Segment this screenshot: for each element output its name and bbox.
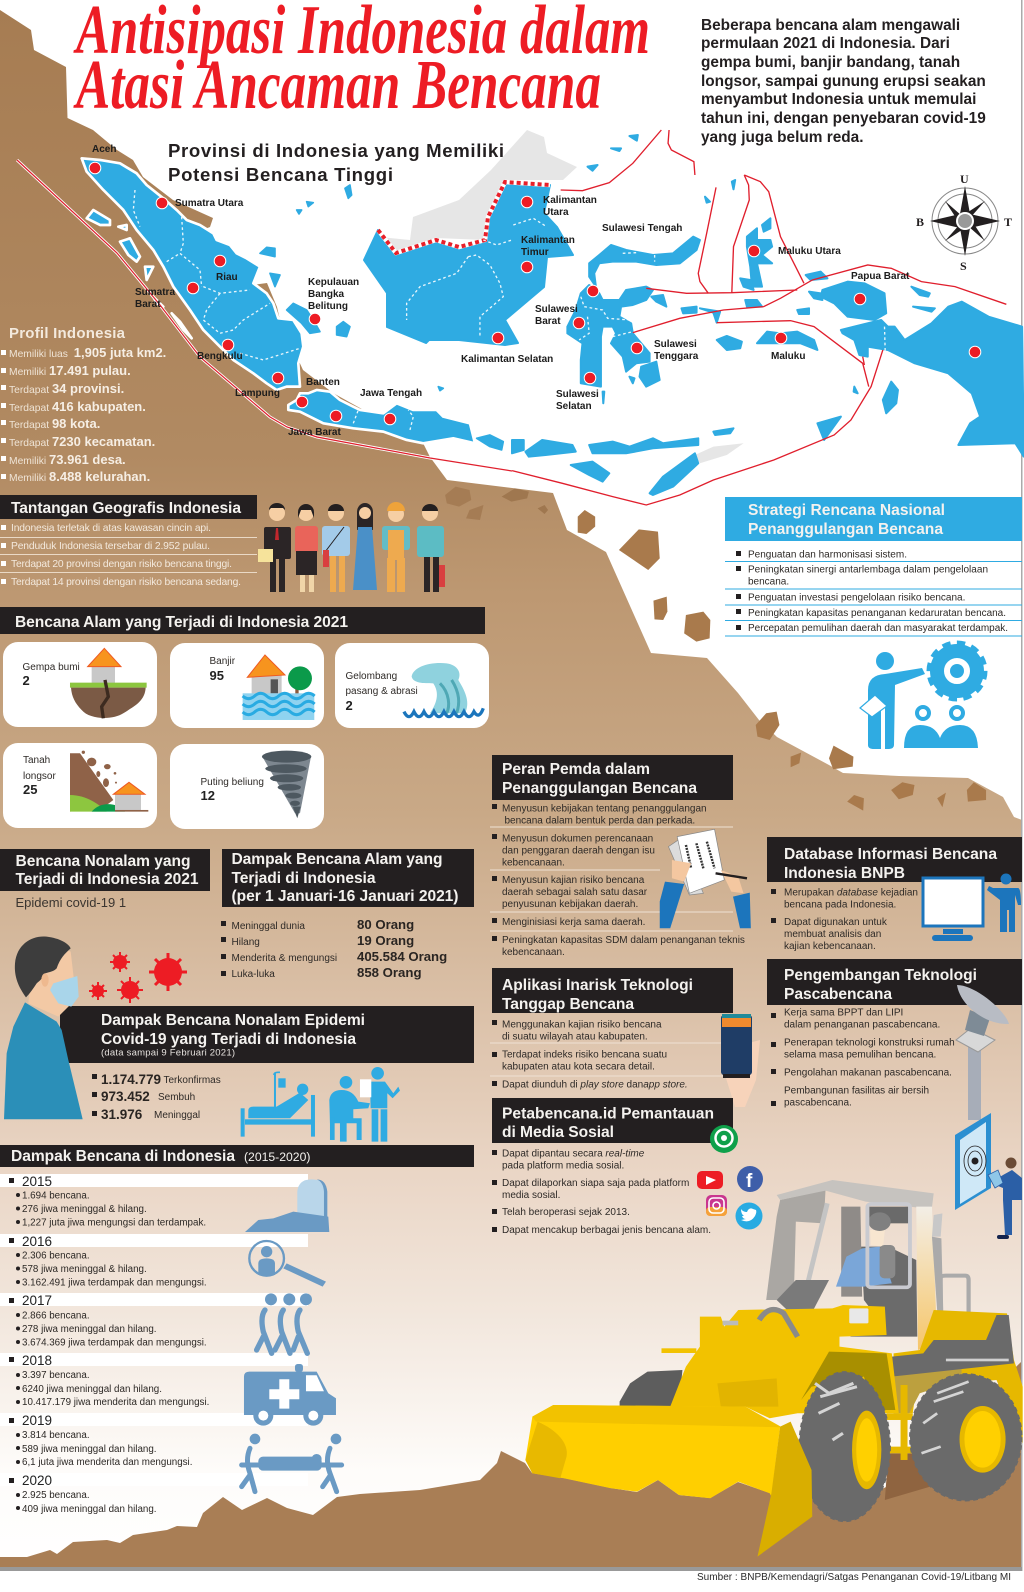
card: banjir: 95 [210, 668, 224, 683]
panel: dampak bencana 2015-2020 [0, 1145, 474, 1515]
year: 2017: 2017 [22, 1293, 52, 1308]
province labels [92, 144, 910, 438]
card: gelombang pasang: pasang & abrasi [346, 686, 418, 697]
panel: petabencana [492, 1098, 733, 1236]
map heading: Potensi Bencana Tinggi [168, 164, 393, 185]
panel: petabencana: media sosial. [502, 1190, 560, 1201]
panel: strategi rencana nasional: Peningkatan sinergi antarlembaga dalam pengelolaan [748, 564, 988, 576]
card: tanah longsor: 25 [23, 782, 37, 797]
panel: dampak bencana alam januari: Terjadi di Indonesia [232, 870, 376, 887]
panel: pengembangan teknologi: selama masa pemulihan bencana. [784, 1050, 936, 1060]
card: banjir [170, 643, 324, 728]
loader: front wheel [799, 1372, 890, 1521]
panel: peran pemda: Peningkatan kapasitas SDM dalam penanganan teknis [502, 935, 745, 946]
year: 2015: 276 jiwa meninggal & hilang. [22, 1204, 147, 1215]
icon: search for victims [249, 1241, 326, 1287]
year: 2020: 409 jiwa meninggal dan hilang. [22, 1504, 157, 1515]
panel: dampak bencana alam januari: Dampak Bencana Alam yang [232, 851, 442, 868]
title [73, 0, 650, 124]
panel: peran pemda: kebencanaan. [502, 947, 565, 958]
panel: bencana nonalam: Epidemi covid-19 1 [16, 895, 126, 910]
panel: database informasi: Merupakan database kejadian [784, 888, 918, 898]
province labels: Sulawesi [535, 304, 578, 315]
year: 2018: 6240 jiwa meninggal dan hilang. [22, 1384, 162, 1395]
panel: database informasi: bencana pada Indonesia. [784, 900, 896, 910]
card: gempa bumi [3, 642, 157, 727]
icon: gravestone [245, 1179, 329, 1232]
panel: bencana nonalam: Terjadi di Indonesia 2021 [16, 871, 199, 888]
intro paragraph: Beberapa bencana alam mengawali [701, 17, 960, 34]
icon: antenna and tablet [955, 985, 1022, 1239]
panel: dampak bencana alam januari: Meninggal dunia [232, 921, 305, 932]
panel: aplikasi inarisk: di suatu wilayah atau kabupaten. [502, 1032, 648, 1042]
panel: aplikasi inarisk: Aplikasi Inarisk Teknologi [502, 977, 693, 994]
icon: hands and document [660, 829, 751, 928]
loader: far wheel [620, 1370, 682, 1407]
intro paragraph: yang juga belum reda. [701, 129, 864, 146]
intro paragraph: longsor, sampai gunung erupsi seakan [701, 73, 986, 90]
panel: dampak covid-19: 973.452 [101, 1089, 150, 1104]
Malaysia and Timor Leste (grey) [380, 130, 744, 463]
panel: dampak bencana alam januari: Hilang [232, 937, 260, 948]
icon: man with mask [4, 936, 83, 1119]
panel: pengembangan teknologi: dalam penanganan pascabencana. [784, 1020, 940, 1030]
panel: dampak bencana alam januari: Luka-luka [232, 969, 275, 980]
icon: six citizens [258, 502, 445, 592]
compass: T [1004, 215, 1012, 229]
panel: petabencana: Petabencana.id Pemantauan [502, 1106, 714, 1122]
card: gempa bumi: 2 [22, 673, 30, 688]
panel: tantangan geografis: Penduduk Indonesia tersebar di 2.952 pulau. [11, 541, 210, 552]
card: puting beliung [170, 744, 324, 829]
card: gelombang pasang [335, 643, 489, 728]
year: 2015: 1.694 bencana. [22, 1190, 90, 1202]
card: banjir: Banjir [210, 656, 236, 667]
panel: pengembangan teknologi: Pengolahan makanan pascabencana. [784, 1068, 952, 1078]
panel: dampak covid-19: Terkonfirmas [164, 1075, 221, 1086]
panel: tantangan geografis: Terdapat 20 provinsi dengan risiko bencana tinggi. [11, 559, 232, 570]
panel: dampak covid-19: Meninggal [154, 1110, 200, 1121]
panel: aplikasi inarisk [490, 968, 733, 1090]
year: 2016: 2.306 bencana. [22, 1250, 90, 1262]
panel: dampak bencana alam januari: (per 1 Januari-16 Januari 2021) [232, 888, 458, 905]
year: 2015: 1,227 juta jiwa mengungsi dan terdampak. [22, 1218, 206, 1228]
panel: profil Indonesia: Terdapat 7230 kecamatan. [9, 434, 155, 449]
panel: bencana nonalam [0, 849, 210, 910]
province labels: Kalimantan Selatan [461, 354, 553, 365]
icon: virus particles [89, 952, 187, 1003]
panel: aplikasi inarisk: Dapat diunduh di play store danapp store. [502, 1080, 688, 1090]
falling rocks [445, 487, 986, 811]
province labels: Bengkulu [197, 351, 243, 362]
panel: profil Indonesia: Terdapat 416 kabupaten. [9, 399, 146, 414]
panel: strategi rencana nasional: Penguatan dan harmonisasi sistem. [748, 550, 907, 560]
loader: cab [766, 1180, 969, 1360]
year: 2018: 10.417.179 jiwa menderita dan mengungsi. [22, 1397, 209, 1408]
panel: petabencana: Dapat dipantau secara real-time [502, 1148, 645, 1160]
panel: bencana alam 2021 heading: Bencana Alam yang Terjadi di Indonesia 2021 [15, 614, 348, 631]
panel: bencana alam 2021 heading [0, 607, 485, 634]
map of Indonesia [17, 130, 1024, 505]
panel: tantangan geografis: Indonesia terletak di atas kawasan cincin api. [11, 523, 211, 534]
panel: database informasi: kajian kebencanaan. [784, 941, 876, 952]
year: 2017: 3.674.369 jiwa terdampak dan mengungsi. [22, 1338, 207, 1348]
province labels: Kepulauan [308, 277, 359, 288]
year: 2016: 3.162.491 jiwa terdampak dan mengungsi. [22, 1278, 207, 1288]
panel: bencana nonalam: Bencana Nonalam yang [16, 853, 190, 870]
panel: aplikasi inarisk: Terdapat indeks risiko bencana suatu [502, 1050, 667, 1060]
icon: instagram [706, 1195, 727, 1216]
panel: profil Indonesia [1, 325, 166, 484]
province labels: Timur [521, 247, 549, 258]
province labels: Sulawesi [654, 339, 697, 350]
card: tanah longsor [3, 743, 157, 828]
panel: pengembangan teknologi: Pembangunan fasilitas air bersih [784, 1086, 929, 1096]
province labels: Kalimantan [543, 195, 597, 206]
panel: peran pemda: Penanggulangan Bencana [502, 780, 697, 797]
panel: database informasi: membuat analisis dan [784, 929, 881, 940]
foreground ground [0, 1362, 1021, 1567]
panel: petabencana: Telah beroperasi sejak 2013. [502, 1207, 630, 1218]
loader: ground shadow [885, 1453, 930, 1500]
loader: rear wheel [910, 1374, 1022, 1501]
province labels: Jawa Tengah [360, 388, 422, 399]
year: 2016: 578 jiwa meninggal & hilang. [22, 1264, 147, 1275]
panel: strategi rencana nasional: bencana. [748, 576, 789, 588]
map heading: Provinsi di Indonesia yang Memiliki [168, 140, 504, 161]
province labels: Riau [216, 272, 238, 283]
icon: whatsapp [710, 1125, 738, 1153]
panel: peran pemda: bencana dalam bentuk perda dan perkada. [504, 816, 695, 826]
loader: bucket [525, 1405, 812, 1557]
panel: dampak bencana alam januari: 858 Orang [357, 965, 422, 980]
panel: strategi rencana nasional: Percepatan pemulihan daerah dan masyarakat terdampak. [748, 623, 1008, 634]
icon: monitor and presenter [923, 874, 1021, 941]
card: puting beliung: 12 [200, 788, 215, 803]
year: 2016: 2016 [22, 1234, 52, 1249]
province labels: Bangka [308, 289, 345, 300]
province labels: Lampung [235, 388, 280, 399]
panel: peran pemda: dan penggaran daerah dengan isu [502, 846, 655, 856]
year: 2018 [0, 1353, 308, 1408]
intro paragraph: gempa bumi, banjir bandang, tanah [701, 54, 960, 71]
panel: database informasi [767, 837, 1022, 952]
panel: dampak bencana alam januari: 19 Orang [357, 933, 414, 948]
loader: rear body [887, 1310, 1023, 1460]
card: gempa bumi: Gempa bumi [22, 662, 80, 673]
province labels: Sumatra [135, 287, 175, 298]
panel: strategi rencana nasional: Peningkatan kapasitas penanganan kedaruratan bencana. [748, 608, 1006, 619]
year: 2015: 2015 [22, 1174, 52, 1189]
year: 2019 [0, 1413, 308, 1468]
icon: facebook: f [746, 1171, 753, 1192]
province labels: Jawa Barat [288, 427, 341, 438]
province labels: Maluku [771, 351, 805, 362]
icon: doctor and patient [329, 1067, 400, 1142]
panel: peran pemda: Peran Pemda dalam [502, 761, 650, 778]
panel: database informasi: Indonesia BNPB [784, 865, 905, 882]
Sumatra and Java [82, 158, 503, 450]
province labels: Sulawesi [556, 389, 599, 400]
bottom band [0, 1567, 1022, 1571]
panel: pengembangan teknologi: Pascabencana [784, 986, 892, 1003]
icon: youtube [697, 1171, 723, 1189]
card: tanah longsor: Tanah [23, 755, 50, 766]
intro paragraph: tahun ini, dengan penyebaran covid-19 [701, 110, 986, 127]
title: Atasi Ancaman Bencana [73, 47, 601, 124]
panel: aplikasi inarisk: Tanggap Bencana [502, 996, 634, 1013]
province labels: Papua Barat [851, 271, 910, 282]
panel: dampak covid-19: Sembuh [158, 1092, 195, 1103]
panel: profil Indonesia: Terdapat 34 provinsi. [9, 381, 124, 396]
province labels: Kalimantan [521, 235, 575, 246]
panel: dampak covid-19: 1.174.779 [101, 1072, 161, 1087]
intro paragraph: permulaan 2021 di Indonesia. Dari [701, 35, 950, 52]
panel: profil Indonesia: Memiliki 8.488 kelurahan. [9, 469, 150, 484]
panel: dampak bencana alam januari [221, 849, 474, 980]
card: puting beliung: Puting beliung [200, 777, 264, 788]
panel: aplikasi inarisk: kabupaten atau kota secara detail. [502, 1062, 655, 1072]
icon: hospital bed [241, 1072, 315, 1137]
province labels: Banten [306, 377, 340, 388]
panel: petabencana: Dapat dilaporkan siapa saja pada platform [502, 1178, 689, 1189]
card: gelombang pasang: Gelombang [346, 671, 397, 682]
card: tanah longsor: longsor [23, 771, 56, 782]
panel: pengembangan teknologi: pascabencana. [784, 1098, 852, 1108]
panel: peran pemda: penyusunan kebijakan daerah. [502, 899, 638, 910]
province labels: Barat [135, 299, 161, 310]
province labels: Sulawesi Tengah [602, 223, 682, 234]
panel: petabencana: di Media Sosial [502, 1124, 614, 1141]
panel: dampak bencana alam januari: 405.584 Orang [357, 949, 447, 964]
year: 2019: 6,1 juta jiwa menderita dan mengungsi. [22, 1457, 192, 1468]
right page edge [1021, 0, 1022, 1571]
panel: aplikasi inarisk: Menggunakan kajian risiko bencana [502, 1020, 662, 1030]
year: 2017: 278 jiwa meninggal dan hilang. [22, 1324, 157, 1335]
eastern islands [512, 135, 1024, 495]
Kalimantan [364, 182, 573, 345]
icon: phone in hand [721, 1014, 760, 1107]
panel: pengembangan teknologi: Pengembangan Teknologi [784, 967, 977, 984]
panel: peran pemda [490, 755, 745, 958]
panel: dampak covid-19: Covid-19 yang Terjadi di Indonesia [101, 1031, 356, 1048]
province labels: Barat [535, 316, 561, 327]
year: 2018: 2018 [22, 1353, 52, 1368]
icon: twitter [736, 1202, 762, 1230]
province labels: Maluku Utara [778, 246, 841, 257]
icon: stretcher bearers [242, 1434, 342, 1492]
province markers [89, 162, 981, 425]
compass [916, 172, 1012, 273]
year: 2017: 2.866 bencana. [22, 1310, 90, 1322]
year: 2016 [0, 1234, 308, 1288]
province labels: Sumatra Utara [175, 198, 244, 209]
panel: peran pemda: Menyusun dokumen perencanaan [502, 834, 653, 844]
panel: dampak covid-19 [60, 1006, 474, 1122]
panel: strategi rencana nasional [725, 497, 1022, 636]
Malaysia border [378, 182, 550, 253]
year: 2019: 2019 [22, 1413, 52, 1428]
province labels: Selatan [556, 401, 592, 412]
panel: tantangan geografis: Tantangan Geografis Indonesia [11, 500, 241, 517]
compass: U [960, 172, 969, 186]
year: 2020: 2.925 bencana. [22, 1490, 90, 1501]
panel: profil Indonesia: Terdapat 98 kota. [9, 416, 100, 431]
year: 2018: 3.397 bencana. [22, 1370, 90, 1381]
panel: dampak covid-19: 31.976 [101, 1107, 143, 1122]
province labels: Utara [543, 207, 569, 218]
panel: profil Indonesia: Profil Indonesia [9, 325, 126, 342]
year: 2020: 2020 [22, 1473, 52, 1488]
card: gelombang pasang: 2 [346, 698, 353, 713]
panel: peran pemda: kebencanaan. [502, 858, 565, 868]
bulldozer illustration [525, 1180, 1023, 1557]
panel: petabencana: pada platform media sosial. [502, 1160, 624, 1172]
source credit: Sumber : BNPB/Kemendagri/Satgas Penanganan Covid-19/Litbang MI [697, 1572, 1011, 1583]
panel: dampak covid-19: (data sampai 9 Februari 2021) [101, 1048, 235, 1058]
panel: profil Indonesia: Memiliki 17.491 pulau. [9, 363, 131, 378]
panel: tantangan geografis [0, 495, 257, 588]
year: 2019: 589 jiwa meninggal dan hilang. [22, 1444, 157, 1455]
loader: front frame [661, 1305, 899, 1418]
icon: ambulance [244, 1364, 336, 1426]
province labels: Tenggara [654, 351, 699, 362]
panel: pengembangan teknologi: Penerapan teknologi konstruksi rumah [784, 1038, 955, 1048]
intro paragraph [701, 17, 986, 146]
map heading [168, 140, 504, 185]
panel: database informasi: Database Informasi Bencana [784, 846, 997, 863]
year: 2020 [0, 1473, 308, 1515]
panel: petabencana: Dapat mencakup berbagai jenis bencana alam. [502, 1225, 711, 1236]
panel: pengembangan teknologi [767, 959, 1022, 1108]
province labels: Belitung [308, 301, 348, 312]
year: 2015 [0, 1174, 308, 1228]
year: 2017 [0, 1293, 308, 1348]
panel: peran pemda: Menyusun kajian risiko bencana [502, 875, 645, 886]
panel: dampak bencana 2015-2020: (2015-2020) [244, 1150, 310, 1164]
tectonic plate lines [512, 130, 1006, 505]
panel: strategi rencana nasional: Penguatan investasi pengelolaan risiko bencana. [748, 592, 965, 604]
panel: pengembangan teknologi: Kerja sama BPPT dan LIPI [784, 1008, 903, 1018]
panel: peran pemda: Menginisiasi kerja sama daerah. [502, 917, 645, 928]
province borders (dashed) [133, 190, 547, 430]
panel: database informasi: Dapat digunakan untuk [784, 917, 888, 928]
panel: peran pemda: daerah sebagai salah satu dasar [502, 887, 648, 898]
province labels: Aceh [92, 144, 116, 155]
year: 2019: 3.814 bencana. [22, 1430, 90, 1441]
panel: tantangan geografis: Terdapat 14 provinsi dengan risiko bencana sedang. [11, 577, 241, 588]
panel: dampak bencana 2015-2020: Dampak Bencana di Indonesia [11, 1148, 235, 1165]
panel: strategi rencana nasional: Strategi Rencana Nasional [748, 502, 945, 519]
compass: S [960, 259, 967, 273]
icon: evacuees walking [257, 1293, 312, 1353]
panel: peran pemda: Menyusun kebijakan tentang penanggulangan [502, 804, 707, 814]
panel: profil Indonesia: Memiliki luas 1,905 juta km2. [9, 345, 166, 360]
icon: facebook [737, 1166, 763, 1192]
icon: strategy people and gear [860, 644, 984, 749]
panel: dampak bencana alam januari: Menderita & mengungsi [232, 953, 337, 964]
panel: strategi rencana nasional: Penanggulangan Bencana [748, 521, 943, 538]
panel: dampak bencana alam januari: 80 Orang [357, 917, 414, 932]
panel: profil Indonesia: Memiliki 73.961 desa. [9, 452, 126, 467]
intro paragraph: menyambut Indonesia untuk memulai [701, 91, 976, 108]
panel: dampak covid-19: Dampak Bencana Nonalam Epidemi [101, 1012, 365, 1029]
compass: B [916, 215, 924, 229]
